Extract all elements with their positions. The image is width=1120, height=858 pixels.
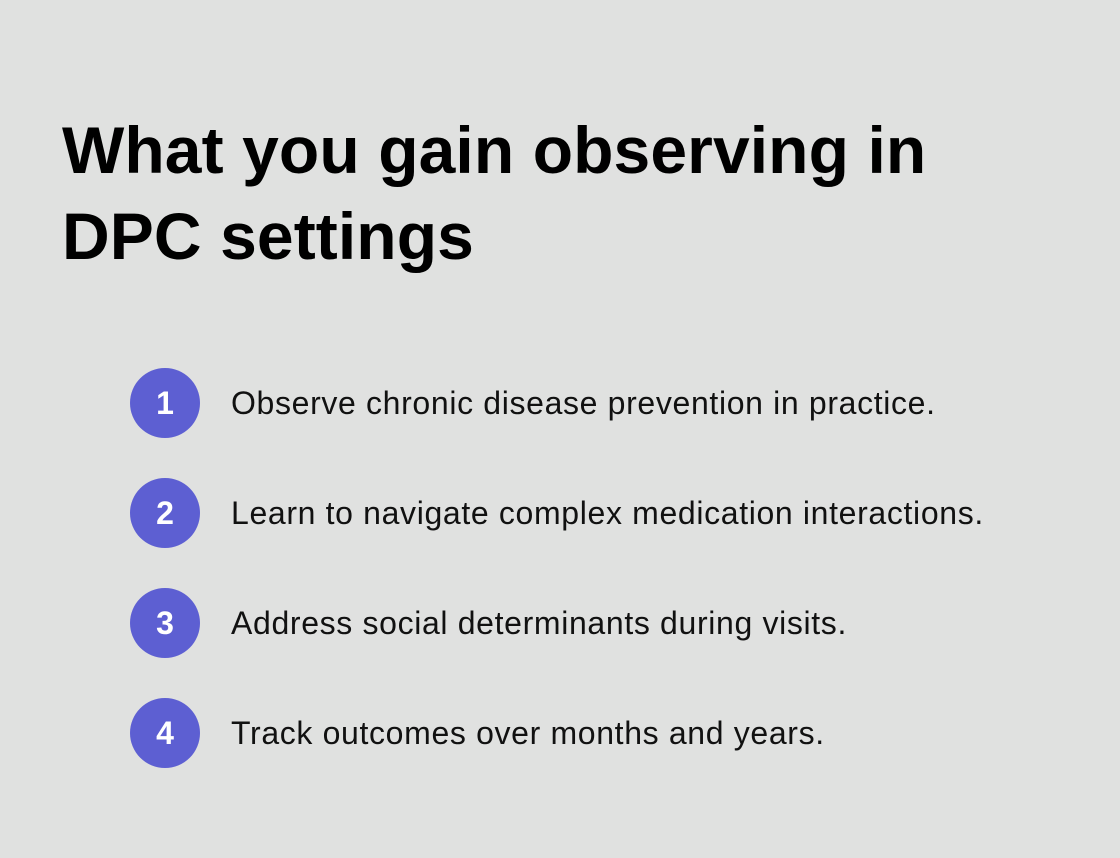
badge 2	[130, 478, 200, 548]
title	[62, 113, 926, 273]
item 3	[130, 588, 847, 658]
badge 2: 2	[156, 495, 174, 531]
text 1: Observe chronic disease prevention in practice.	[231, 385, 936, 421]
badge 1	[130, 368, 200, 438]
badge 4: 4	[156, 715, 174, 751]
text 3: Address social determinants during visits.	[231, 605, 847, 641]
badge 3: 3	[156, 605, 174, 641]
badge 3	[130, 588, 200, 658]
title: DPC settings	[62, 199, 474, 273]
title: What you gain observing in	[62, 113, 926, 187]
item 1	[130, 368, 936, 438]
item 2	[130, 478, 984, 548]
text 4: Track outcomes over months and years.	[231, 715, 825, 751]
text 2: Learn to navigate complex medication interactions.	[231, 495, 984, 531]
item 4	[130, 698, 825, 768]
badge 1: 1	[156, 385, 174, 421]
badge 4	[130, 698, 200, 768]
